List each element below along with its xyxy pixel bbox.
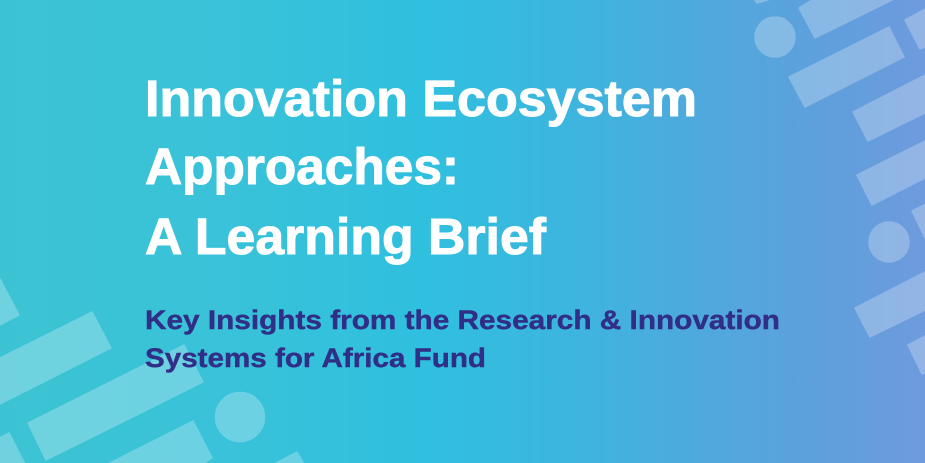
subtitle: Key Insights from the Research & Innovation <box>145 305 780 335</box>
subtitle: Systems for Africa Fund <box>145 343 486 373</box>
title: Approaches: <box>145 138 459 195</box>
title: A Learning Brief <box>145 208 547 265</box>
decorative shapes: top right <box>755 0 925 374</box>
title: Innovation Ecosystem <box>145 70 697 127</box>
subtitle <box>145 305 780 373</box>
title <box>145 70 697 265</box>
decorative shapes: bottom left <box>0 279 304 463</box>
